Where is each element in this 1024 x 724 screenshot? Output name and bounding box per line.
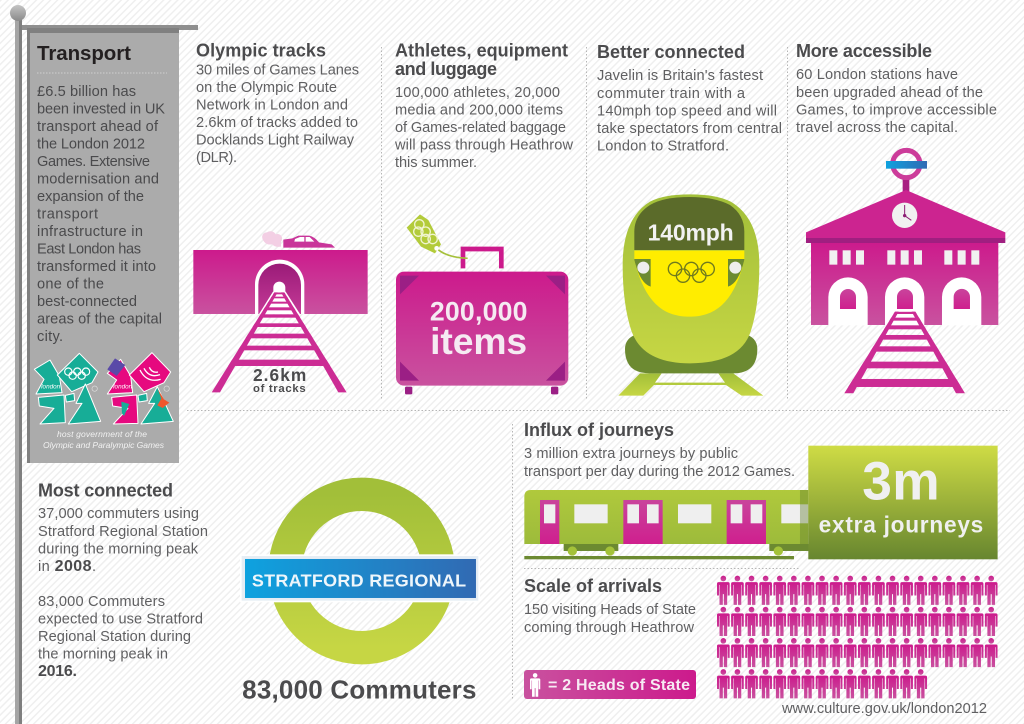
illustration: tunnel and tracks: of tracks xyxy=(253,383,306,395)
text: transport intro: modernisation and xyxy=(37,172,159,188)
legend: person equals 2 heads of state: = 2 Heads of State xyxy=(548,677,690,694)
text block: Most connected: during the morning peak xyxy=(38,542,199,558)
caption: host government xyxy=(43,429,165,450)
text: transport intro: expansion of the xyxy=(37,189,144,205)
text block: Scale of arrivals: 150 visiting Heads of State xyxy=(524,602,696,618)
illustration: tunnel and tracks xyxy=(193,231,368,392)
icon: car xyxy=(283,236,335,248)
text block: Influx of journeys xyxy=(524,420,795,480)
text block: Athletes, equipment and luggage: of Games-related baggage xyxy=(395,120,566,136)
text: transport intro: £6.5 billion has xyxy=(37,84,136,100)
text block: Most connected: 37,000 commuters using xyxy=(38,506,199,522)
text: transport intro: one of the xyxy=(37,276,104,292)
source url: www.culture.gov.uk/london2012 xyxy=(781,701,987,717)
illustration: Stratford Regional roundel xyxy=(240,494,480,704)
heading: transport: Transport xyxy=(37,42,131,65)
icon: roundel xyxy=(903,177,909,193)
icon: London 2012 logos: london xyxy=(41,384,61,391)
legend: person equals 2 heads of state xyxy=(524,670,696,699)
text: transport intro: transport ahead of xyxy=(37,119,159,135)
text block: Scale of arrivals: coming through Heathrow xyxy=(524,620,694,636)
text: transport intro: Games. Extensive xyxy=(37,154,150,170)
text block: Better connected: Javelin is Britain's fastest xyxy=(597,68,763,84)
text block: Athletes, equipment and luggage: 100,000 athletes, 20,000 xyxy=(395,85,560,101)
text block: More accessible: More accessible xyxy=(796,41,932,61)
label: extra journeys: extra journeys xyxy=(819,511,983,537)
text: transport intro: areas of the capital xyxy=(37,312,162,328)
text block: More accessible: travel across the capital. xyxy=(796,120,958,136)
text: transport intro: the London 2012 xyxy=(37,136,145,152)
text block: Most connected: 83,000 Commuters xyxy=(38,594,165,610)
illustration: suitcase: items xyxy=(430,320,527,362)
text: transport intro xyxy=(37,84,165,345)
text block: Olympic tracks: Olympic tracks xyxy=(196,40,326,60)
text block: Better connected xyxy=(597,42,782,154)
text block: Better connected: 140mph top speed and will xyxy=(597,104,777,120)
text block: Athletes, equipment and luggage: will pass through Heathrow xyxy=(394,138,573,154)
text: transport intro: best-connected xyxy=(37,294,137,310)
text block: Most connected: Stratford Regional Station xyxy=(38,524,208,540)
text block: Athletes, equipment and luggage: this summer. xyxy=(395,155,477,171)
text block: Olympic tracks: Network in London and xyxy=(196,98,348,114)
text: transport intro: city. xyxy=(37,329,63,345)
text: transport intro: infrastructure in xyxy=(37,224,143,240)
caption: host government: Olympic and Paralympic Games xyxy=(43,440,165,450)
text block: Scale of arrivals xyxy=(524,576,696,636)
text block: Olympic tracks: (DLR). xyxy=(196,150,237,166)
text block: Most connected: expected to use Stratford xyxy=(38,612,203,628)
text block: Olympic tracks: 2.6km of tracks added to xyxy=(196,115,358,131)
icon: clock xyxy=(892,203,917,228)
text block: More accessible xyxy=(796,41,997,136)
text block: Olympic tracks: Docklands Light Railway xyxy=(196,132,355,148)
text block: Athletes, equipment and luggage: Athletes, equipment xyxy=(395,40,568,60)
text: transport intro: transformed it into xyxy=(37,259,156,275)
illustration: train side with 3m box xyxy=(524,446,998,559)
text: transport intro: transport xyxy=(37,206,98,222)
label: 200,000 items: 200,000 xyxy=(430,297,527,327)
text block: More accessible: been upgraded ahead of the xyxy=(796,85,983,101)
icon: exhaust cloud xyxy=(262,231,282,247)
text block: Athletes, equipment and luggage xyxy=(394,40,573,171)
illustration: suitcase xyxy=(396,214,568,394)
text block: Olympic tracks xyxy=(196,40,359,166)
icon: luggage tag xyxy=(437,248,468,258)
illustration: station building xyxy=(800,150,1013,393)
text block: Influx of journeys: transport per day during the 2012 Games. xyxy=(524,464,795,480)
text block: Scale of arrivals: Scale of arrivals xyxy=(524,576,662,596)
text: transport intro: East London has xyxy=(37,242,141,258)
label: 140mph: 140mph xyxy=(648,219,734,245)
label: 83,000 Commuters: 83,000 Commuters xyxy=(242,674,476,704)
text block: Better connected: take spectators from central xyxy=(597,121,782,137)
text block: Olympic tracks: 30 miles of Games Lanes xyxy=(196,62,359,78)
icon: London 2012 logos xyxy=(34,353,173,424)
panel: transport flag xyxy=(10,5,198,724)
text block: Most connected: Regional Station during xyxy=(38,629,191,645)
text block: Better connected: commuter train with a xyxy=(597,86,746,102)
text block: Athletes, equipment and luggage: media and 200,000 items xyxy=(395,102,563,118)
label: Stratford Regional: STRATFORD REGIONAL xyxy=(252,570,466,590)
pictogram: 75 people representing 150 heads of state xyxy=(717,576,998,698)
text block: Better connected: Better connected xyxy=(597,42,745,62)
label: 2.6km of tracks: 2.6km xyxy=(253,365,306,385)
caption: host government: host government of the xyxy=(57,429,147,439)
text block: Influx of journeys: Influx of journeys xyxy=(524,420,674,440)
text block: Most connected: Most connected xyxy=(38,480,173,500)
icon: London 2012 logos: london xyxy=(113,384,133,391)
text block: More accessible: Games, to improve accessible xyxy=(796,102,997,118)
text block: Most connected: 2016. xyxy=(38,663,77,680)
text block: Most connected: in 2008. xyxy=(38,558,96,575)
text block: Most connected: the morning peak in xyxy=(38,646,168,662)
text block: Olympic tracks: on the Olympic Route xyxy=(196,80,337,96)
text block: Influx of journeys: 3 million extra journeys by public xyxy=(524,446,738,462)
text block: Athletes, equipment and luggage: and luggage xyxy=(395,59,497,79)
illustration: Javelin train front xyxy=(618,194,763,396)
text: transport intro: been invested in UK xyxy=(37,102,165,118)
text block: Better connected: London to Stratford. xyxy=(597,138,729,154)
label: 3m: 3m xyxy=(862,452,940,511)
text block: More accessible: 60 London stations have xyxy=(796,67,958,83)
text block: Most connected xyxy=(38,480,208,680)
